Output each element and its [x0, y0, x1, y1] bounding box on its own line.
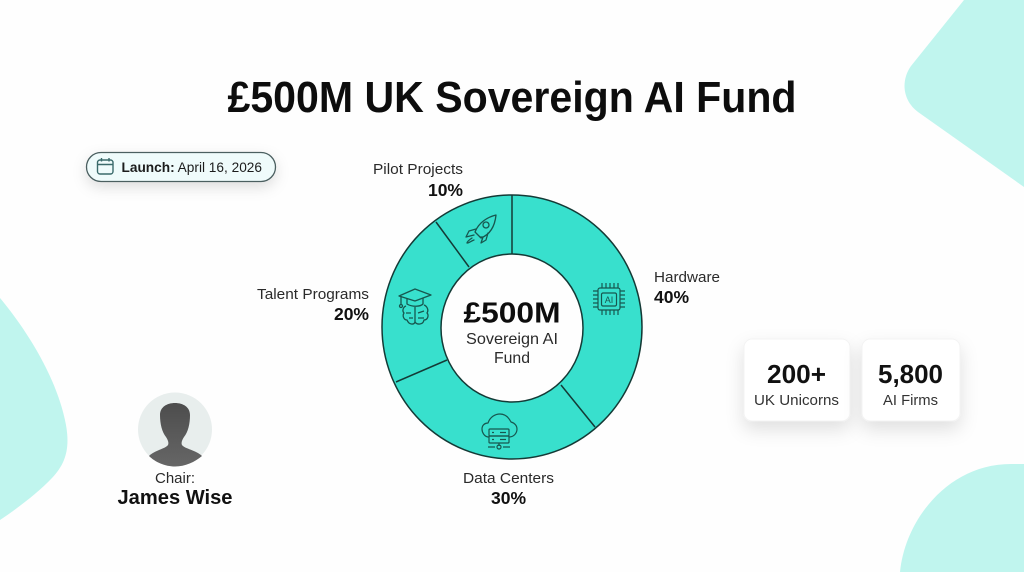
stat card: UK unicorns: UK Unicorns [754, 392, 839, 409]
donut centre label: Fund [494, 350, 530, 367]
blob: top right [905, 0, 1024, 187]
launch date badge [86, 152, 276, 182]
donut centre label: Sovereign AI [466, 331, 558, 348]
icon: graduation cap and brain [399, 289, 431, 324]
label: talent programs [257, 286, 369, 324]
launch text: Launch: April 16, 2026 [122, 159, 262, 175]
avatar circle [138, 392, 212, 466]
label: pilot projects: 10% [428, 180, 463, 200]
icon: calendar [98, 158, 113, 174]
label: data centers [463, 470, 554, 508]
icon: cloud server [482, 414, 517, 449]
label: pilot projects: Pilot Projects [373, 161, 463, 178]
blob: left [0, 298, 67, 520]
label: data centers: 30% [491, 488, 526, 508]
blob: bottom right [900, 464, 1024, 572]
icon: AI chip: AI [605, 295, 613, 305]
label: talent programs: Talent Programs [257, 286, 369, 303]
icon: person silhouette [149, 403, 202, 466]
chair portrait [118, 392, 232, 509]
stat card: UK unicorns: 200+ [767, 359, 826, 389]
donut centre label: £500M [464, 298, 560, 330]
chair label: Chair: [155, 470, 195, 487]
label: hardware: 40% [654, 287, 689, 307]
label: talent programs: 20% [334, 304, 369, 324]
icon: rocket [466, 215, 496, 243]
icon: AI chip [593, 283, 625, 315]
title: £500M UK Sovereign AI Fund [228, 73, 796, 122]
chair name: James Wise [118, 487, 232, 509]
stat card: AI firms: AI Firms [883, 392, 938, 409]
stat card: AI firms: 5,800 [878, 359, 943, 389]
label: pilot projects [373, 161, 463, 200]
label: hardware: Hardware [654, 269, 720, 286]
stat card: UK unicorns [744, 339, 850, 421]
label: data centers: Data Centers [463, 470, 554, 487]
donut centre label [464, 298, 560, 367]
label: hardware [654, 269, 720, 307]
donut chart [382, 195, 642, 459]
segment dividers [396, 195, 595, 427]
stat card: AI firms [862, 339, 960, 421]
donut ring [382, 195, 642, 459]
